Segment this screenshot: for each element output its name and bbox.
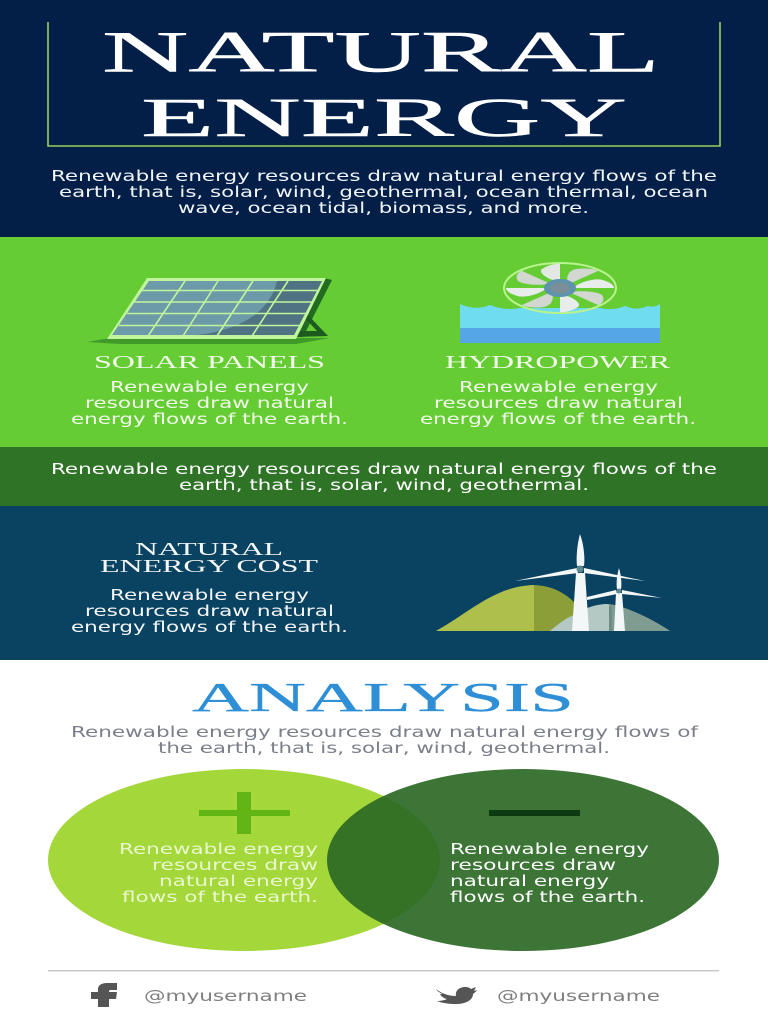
icon: hydropower wheel (460, 263, 660, 343)
panel: green energy types (0, 237, 768, 447)
panel: dark green band: earth, that is, solar, wind, geothermal. (179, 476, 589, 494)
text: hydropower: resources draw natural (434, 394, 683, 412)
icon: minus (489, 810, 580, 816)
title (102, 20, 660, 148)
icon: twitter (436, 987, 477, 1004)
text: minus side: resources draw (450, 856, 616, 874)
text: hydropower (420, 378, 696, 428)
text: solar panels: Renewable energy (110, 378, 309, 396)
intro text: Renewable energy resources draw natural energy flows of the (51, 167, 717, 185)
panel: header (0, 0, 768, 237)
title frame (48, 22, 720, 146)
text: cost (71, 586, 348, 636)
wheel (504, 263, 616, 313)
heading: solar panels: SOLAR PANELS (94, 352, 325, 372)
intro text: wave, ocean tidal, biomass, and more. (178, 199, 589, 217)
text: plus side: resources draw (152, 856, 318, 874)
icon: facebook (91, 983, 117, 1007)
text: minus side: natural energy (450, 872, 609, 890)
text: solar panels: energy flows of the earth. (71, 410, 348, 428)
footer (48, 970, 719, 1007)
heading: hydropower: HYDROPOWER (445, 352, 670, 372)
text: plus side: natural energy (159, 872, 318, 890)
text: analysis intro: Renewable energy resources draw natural energy flows of (71, 723, 699, 741)
heading: natural energy cost (100, 539, 318, 576)
panel: natural energy cost (0, 506, 768, 660)
text: cost: resources draw natural (85, 602, 334, 620)
intro text (51, 167, 717, 217)
plus circle (48, 769, 440, 951)
text: minus side (450, 840, 649, 906)
icon: plus (199, 792, 290, 834)
heading: natural energy cost: NATURAL (135, 539, 283, 559)
text: cost: Renewable energy (110, 586, 309, 604)
title: NATURAL (102, 20, 660, 84)
title: ENERGY (141, 87, 627, 148)
text: plus side: flows of the earth. (122, 888, 318, 906)
text: facebook username: @myusername (144, 987, 307, 1005)
icon: wind turbines on hills (436, 534, 670, 631)
text: solar panels (71, 378, 348, 428)
intro text: earth, that is, solar, wind, geothermal, ocean thermal, ocean (59, 183, 708, 201)
text: cost: energy flows of the earth. (71, 618, 348, 636)
text: twitter username: @myusername (497, 987, 660, 1005)
text: plus side (119, 840, 318, 906)
text: minus side: Renewable energy (450, 840, 649, 858)
panel: dark green band (0, 447, 768, 506)
text: minus side: flows of the earth. (450, 888, 645, 906)
text: analysis intro (71, 723, 699, 757)
text: plus side: Renewable energy (119, 840, 318, 858)
text: analysis intro: the earth, that is, solar, wind, geothermal. (158, 739, 610, 757)
text: hydropower: energy flows of the earth. (420, 410, 696, 428)
minus circle (327, 769, 719, 951)
heading: natural energy cost: ENERGY COST (100, 556, 318, 576)
chart: venn diagram (48, 769, 719, 951)
heading: analysis: ANALYSIS (192, 674, 574, 720)
text: solar panels: resources draw natural (85, 394, 334, 412)
icon: solar panel (87, 278, 332, 344)
text: hydropower: Renewable energy (459, 378, 658, 396)
panel: dark green band: Renewable energy resources draw natural energy flows of the (51, 460, 717, 478)
